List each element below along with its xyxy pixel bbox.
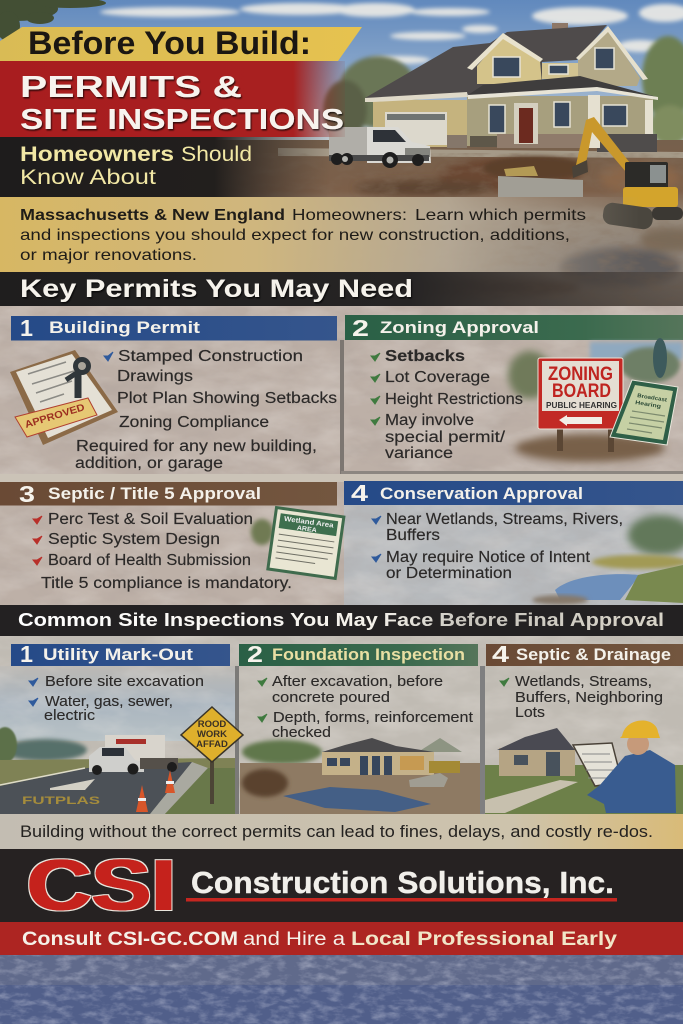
zoning list: Lot Coverage <box>385 369 490 386</box>
panel: utility mark-out <box>0 641 243 814</box>
road scene: FUTPLAS <box>22 795 100 807</box>
title banner: permits and site inspections <box>0 61 345 137</box>
drainage header <box>486 641 683 667</box>
marsh scene <box>532 515 683 605</box>
company name: Construction Solutions, Inc. <box>191 865 614 900</box>
conservation list: May require Notice of Intent <box>386 549 591 566</box>
gable trim <box>467 33 543 70</box>
utility header: Utility Mark-Out <box>43 645 193 664</box>
foundation checks <box>258 678 267 722</box>
gravel footer <box>0 955 683 1024</box>
section heading: common inspections <box>0 605 683 636</box>
building permit header: Building Permit <box>49 318 200 337</box>
foundation header: Foundation Inspection <box>272 645 465 664</box>
tree top left <box>0 0 106 41</box>
building permit list: Zoning Compliance <box>119 414 269 431</box>
call to action band <box>0 922 683 955</box>
utility list: Before site excavation <box>45 674 204 690</box>
septic header: Septic / Title 5 Approval <box>48 484 261 503</box>
call to action band: and Hire a <box>243 929 345 950</box>
lower walls <box>373 100 467 147</box>
icon: approved clipboard: APPROVED <box>24 402 86 431</box>
inspector with clipboard <box>573 720 676 813</box>
conservation list: Near Wetlands, Streams, Rivers, <box>386 511 623 528</box>
road work sign: ROOD <box>198 719 226 730</box>
conservation list: or Determination <box>386 565 512 582</box>
building permit list: Stamped Construction <box>118 348 303 365</box>
call to action band: Local Professional Early <box>351 929 618 950</box>
zoning list: May involve <box>385 412 474 429</box>
section heading: common inspections: Common Site Inspections You May Face Before Final Approval <box>18 609 664 630</box>
excavation and foundation <box>483 156 587 197</box>
title banner: permits and site inspections: PERMITS & <box>20 69 242 104</box>
hearing notice: Hearing <box>635 400 661 410</box>
porch roof <box>468 76 657 97</box>
main roof <box>365 25 607 98</box>
upper walls <box>578 29 640 86</box>
foundation list: concrete poured <box>272 690 390 706</box>
clouds <box>100 3 683 64</box>
septic list: Perc Test & Soil Evaluation <box>48 511 253 528</box>
front door <box>514 103 538 144</box>
zoning header: Zoning Approval <box>380 318 539 337</box>
foundation header <box>239 641 478 667</box>
subtitle band: Homeowners <box>20 143 174 166</box>
building permit list: Drawings <box>117 368 193 385</box>
septic list: Board of Health Submission <box>48 552 251 569</box>
subtitle band <box>0 137 330 197</box>
title banner: permits and site inspections: SITE INSPECTIONS <box>20 104 344 136</box>
building permit list: Required for any new building, <box>76 438 317 455</box>
traffic cones <box>136 770 175 812</box>
building permit list <box>75 348 337 472</box>
drainage list: Lots <box>515 705 545 721</box>
wetland notice paper: Wetland Area <box>283 516 334 530</box>
trees behind house <box>323 36 683 145</box>
subtitle band: Should <box>181 143 252 166</box>
septic list: Title 5 compliance is mandatory. <box>41 575 292 592</box>
conservation list: Buffers <box>386 527 440 544</box>
zoning list: variance <box>385 445 453 462</box>
building permit header <box>11 315 337 341</box>
building permit header: 1 <box>20 315 33 341</box>
utility list <box>44 674 204 724</box>
section heading: key permits: Key Permits You May Need <box>20 275 413 303</box>
driveway <box>278 148 683 158</box>
red underline <box>186 898 617 902</box>
panel: septic title 5 approval <box>0 481 344 592</box>
intro text band: or major renovations. <box>20 247 197 264</box>
conservation checks <box>372 516 381 562</box>
house <box>365 23 658 152</box>
zoning scene foliage <box>508 338 683 462</box>
hearing notice <box>610 380 678 445</box>
drainage list: Wetlands, Streams, <box>515 674 652 690</box>
drainage check <box>500 678 509 686</box>
logo: CSI: CSI <box>27 846 176 926</box>
ground <box>0 140 683 310</box>
garage door <box>385 112 447 145</box>
warning statement band: Building without the correct permits can lead to fines, delays, and costly re-dos. <box>20 822 653 841</box>
zoning list: special permit/ <box>385 429 506 446</box>
zoning list <box>385 348 523 462</box>
title banner: before you build: Before You Build: <box>28 25 311 61</box>
building permit list: addition, or garage <box>75 455 223 472</box>
utility checks <box>29 678 38 706</box>
foundation list <box>272 674 473 741</box>
porch columns <box>588 95 653 148</box>
wetland notice paper <box>268 508 344 578</box>
panel: foundation inspection <box>239 641 480 814</box>
zoning list: Setbacks <box>385 348 465 365</box>
septic header <box>0 481 337 507</box>
chimney <box>552 23 568 34</box>
intro text band: Massachusetts & New England <box>20 207 285 224</box>
foundation scene <box>240 738 480 814</box>
utility header <box>11 641 230 667</box>
zoning checks <box>371 353 380 425</box>
septic list <box>41 511 292 592</box>
zoning header: 2 <box>352 315 369 341</box>
drainage list <box>515 674 663 721</box>
section heading: key permits <box>0 272 683 306</box>
road scene <box>0 727 235 814</box>
warning statement band <box>0 814 683 849</box>
utility truck <box>89 735 178 775</box>
hearing notice: Broadcast <box>637 393 667 404</box>
foundation list: checked <box>272 725 331 741</box>
zoning board sign <box>538 358 623 452</box>
conservation header <box>344 480 683 506</box>
panel: septic and drainage <box>485 641 683 814</box>
permits panels background <box>0 306 683 606</box>
inspections panels background <box>0 636 683 814</box>
septic checks <box>33 516 42 565</box>
hero scene background <box>0 0 683 310</box>
dirt mottling <box>355 157 683 298</box>
road work sign: AFFAD <box>196 739 228 750</box>
zoning board sign: ZONING <box>548 364 613 385</box>
drainage list: Buffers, Neighboring <box>515 690 663 706</box>
foundation list: After excavation, before <box>272 674 443 690</box>
fascia <box>365 92 468 102</box>
subtitle band: Know About <box>20 166 156 189</box>
utility header: 1 <box>20 641 33 667</box>
stone base <box>447 135 467 148</box>
utility list: electric <box>44 708 95 724</box>
drainage scene <box>485 728 683 814</box>
small house <box>497 728 575 776</box>
intro text band: Homeowners: <box>292 207 407 224</box>
conservation list <box>386 511 623 582</box>
check <box>104 352 113 361</box>
foundation header: 2 <box>247 641 263 667</box>
intro text band <box>0 197 640 272</box>
panel: building permit <box>10 315 337 472</box>
road work sign: WORK <box>197 729 227 740</box>
road work sign <box>181 707 243 804</box>
drainage header: 4 <box>492 641 509 667</box>
septic list: Septic System Design <box>48 531 220 548</box>
panel: conservation approval <box>344 480 683 605</box>
septic header: 3 <box>19 481 35 507</box>
conservation header: Conservation Approval <box>380 484 583 503</box>
service truck <box>329 127 431 168</box>
wetland notice paper: AREA <box>296 525 317 534</box>
intro text band: and inspections you should expect for new construction, additions, <box>20 227 570 244</box>
zoning board sign: BOARD <box>552 381 611 402</box>
intro text band: Learn which permits <box>415 207 586 224</box>
utility list: Water, gas, sewer, <box>45 694 173 710</box>
conservation header: 4 <box>351 480 368 506</box>
company logo band <box>0 846 683 926</box>
call to action band: Consult CSI-GC.COM <box>22 929 238 950</box>
zoning list: Height Restrictions <box>385 391 523 408</box>
zoning header <box>345 315 683 341</box>
icon: approved clipboard <box>10 350 118 445</box>
drainage header: Septic & Drainage <box>516 645 671 664</box>
panel: zoning approval <box>345 315 683 462</box>
building permit list: Plot Plan Showing Setbacks <box>117 390 337 407</box>
excavator <box>572 117 683 230</box>
windows <box>489 48 627 133</box>
house <box>322 738 434 775</box>
zoning board sign: PUBLIC HEARING <box>546 400 617 410</box>
foundation list: Depth, forms, reinforcement <box>273 710 473 726</box>
foliage beside notice <box>251 519 273 545</box>
